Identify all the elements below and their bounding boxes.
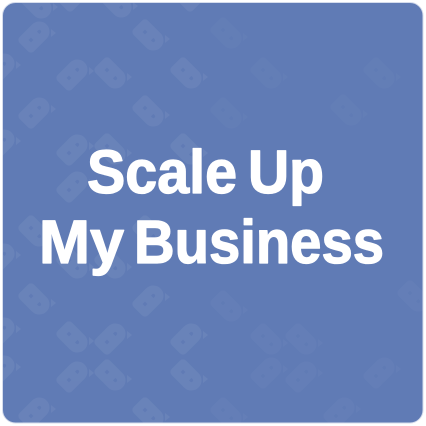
- title: Up: [248, 138, 324, 206]
- title: Scale: [87, 138, 237, 206]
- title: Business: [134, 208, 384, 276]
- background pattern: fading logo watermarks on the right: [215, 22, 426, 424]
- title: [39, 138, 384, 276]
- background pattern: faint logo watermarks on the left: [0, 0, 215, 424]
- title: My: [39, 208, 124, 276]
